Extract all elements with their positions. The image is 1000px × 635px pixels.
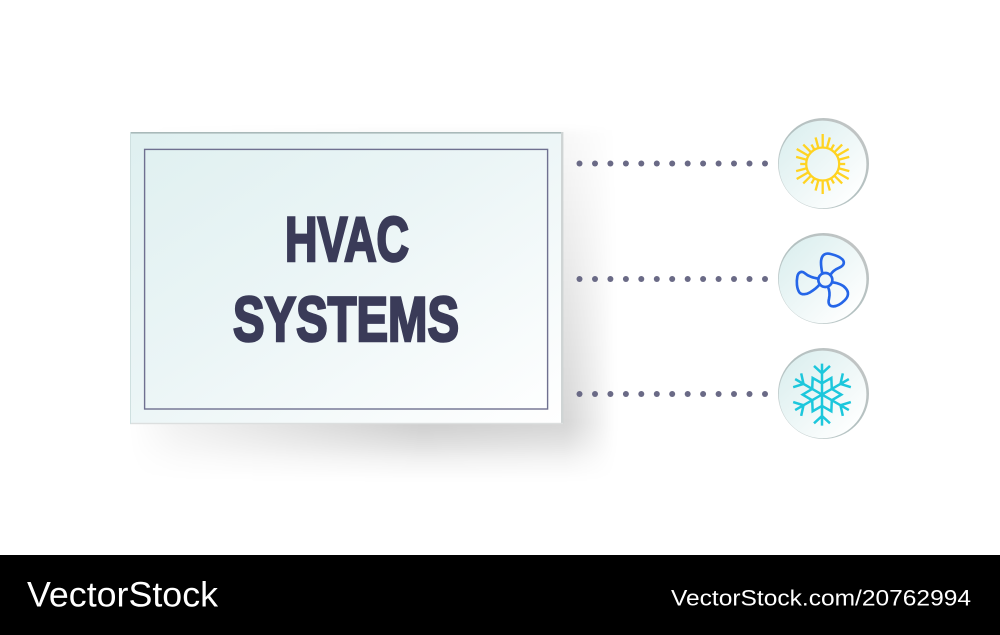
- card drop shadow: [161, 144, 605, 466]
- icon: snowflake badge: [778, 348, 869, 439]
- icon: fan badge: [778, 233, 869, 324]
- panel: title card: [130, 132, 563, 424]
- dotted connector: heating: [576, 160, 768, 166]
- card inner frame: [145, 149, 548, 409]
- footer bar: [0, 555, 1000, 635]
- title: HVAC SYSTEMS: SYSTEMS: [233, 285, 459, 355]
- dotted connector: cooling: [576, 391, 768, 397]
- footer url text: VectorStock.com/20762994: [671, 586, 971, 610]
- icon: sun badge: [778, 118, 869, 209]
- title: HVAC SYSTEMS: HVAC: [285, 205, 409, 275]
- title: HVAC SYSTEMS: [233, 205, 459, 355]
- dotted connector: ventilation: [576, 276, 768, 282]
- footer logo text: VectorStock: [27, 574, 218, 614]
